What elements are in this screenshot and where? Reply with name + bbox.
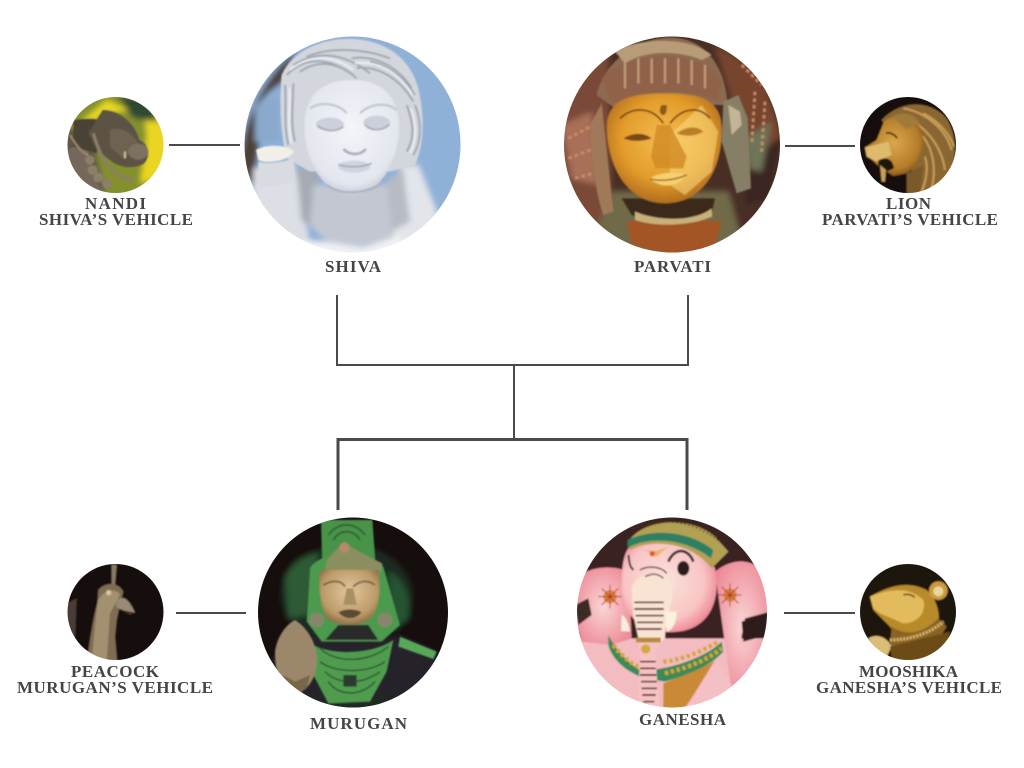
label: Mooshika, Ganesha's vehicle: GANESHA’S VEHICLE [816,678,1002,697]
panel: Nandi [39,90,193,229]
label: Nandi, Shiva's vehicle: NANDI [85,194,146,213]
label: Ganesha: GANESHA [639,710,727,729]
portrait: Lion brass statue [860,97,956,193]
portrait: Shiva marble statue [244,36,460,252]
family tree connector: parents to children [337,295,688,510]
label: Nandi, Shiva's vehicle: SHIVA’S VEHICLE [39,210,193,229]
panel: Mooshika [816,560,1002,697]
panel: Parvati [564,36,780,272]
connector: Peacock to Murugan [176,612,246,614]
panel: Shiva [244,36,460,272]
label: Lion, Parvati's vehicle [822,194,998,229]
label: Peacock, Murugan's vehicle: MURUGAN’S VEHICLE [17,678,213,697]
panel: Ganesha [577,518,767,725]
label: Nandi, Shiva's vehicle [39,194,193,229]
label: Peacock, Murugan's vehicle: PEACOCK [71,662,160,681]
panel: Murugan [258,518,448,729]
portrait: Peacock brass statue [68,564,164,660]
label: Lion, Parvati's vehicle: PARVATI’S VEHICLE [822,210,998,229]
portrait: Ganesha painted statue [577,518,767,708]
label: Parvati: PARVATI [634,257,711,276]
label: Shiva: SHIVA [325,257,382,276]
portrait: Mooshika brass statue [860,564,956,660]
portrait: Murugan green-and-brass statue [258,518,448,708]
label: Mooshika, Ganesha's vehicle: MOOSHIKA [859,662,959,681]
connector: Nandi to Shiva [169,144,240,146]
label: Mooshika, Ganesha's vehicle [816,662,1002,697]
panel: Peacock [17,560,213,697]
portrait: Nandi bull statue [68,97,164,193]
connector: Mooshika to Ganesha [784,612,855,614]
connector: Lion to Parvati [785,145,855,147]
portrait: Parvati brass statue [564,36,780,252]
label: Lion, Parvati's vehicle: LION [886,194,932,213]
label: Murugan: MURUGAN [310,714,408,733]
panel: Lion [822,93,998,229]
label: Peacock, Murugan's vehicle [17,662,213,697]
